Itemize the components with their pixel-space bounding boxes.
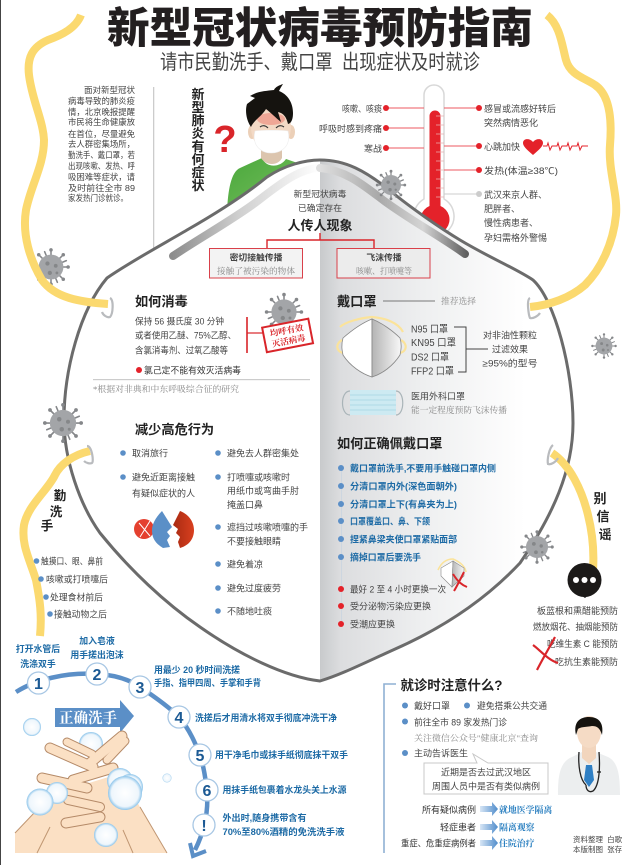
panel: when seeing a doctor: 就诊时注意什么?: [400, 677, 502, 693]
rumour list: 板蓝根和熏醋能预防: [537, 605, 618, 616]
vertical heading: symptoms: 有: [191, 139, 205, 154]
panel: how to wear a mask: 分清口罩内外(深色面朝外): [350, 480, 457, 492]
virus decorations: [32, 170, 617, 564]
panel: how to disinfect: 氯己定不能有效灭活病毒: [144, 364, 241, 376]
panel: how to wear a mask: 受分泌物污染应更换: [350, 600, 431, 612]
step arc with arrow: [16, 674, 207, 856]
symptom labels right: [444, 103, 558, 243]
panel: reduce risky behaviour: 用纸巾或弯曲手肘: [227, 485, 299, 496]
symptom labels right: 发热(体温≥38℃): [484, 165, 558, 176]
vertical heading: symptoms: 症: [191, 165, 205, 180]
arrow: correct hand washing: 正确洗手: [59, 709, 117, 727]
step markers: 1: [34, 676, 43, 693]
symptom labels right: 孕妇需格外警惕: [484, 232, 547, 243]
panel: reduce risky behaviour: 有疑似症状的人: [132, 488, 195, 498]
step markers: [28, 663, 218, 836]
step markers: 3: [136, 680, 145, 697]
panel: wearing masks: N95 口罩: [411, 324, 448, 336]
panel: reduce risky behaviour: 不随地吐痰: [227, 606, 272, 616]
panel: human to human transmission: 飞沫传播: [366, 252, 402, 262]
panel: when seeing a doctor: 关注微信公众号"健康北京"查询: [414, 733, 539, 743]
panel: wearing masks: ≥95%的型号: [482, 358, 538, 368]
step markers: 2: [93, 667, 102, 684]
panel: human to human transmission: 密切接触传播: [230, 252, 283, 262]
step markers: 4: [175, 710, 184, 727]
panel: reduce risky behaviour: 避免着凉: [227, 558, 263, 570]
intro text block: 情，北京晚报提醒: [68, 107, 136, 117]
panel: how to wear a mask: 受潮应更换: [350, 618, 395, 630]
panel: how to disinfect: [93, 293, 313, 394]
icon: speech bubble: [568, 563, 602, 598]
triage flow: 隔离观察: [499, 822, 535, 832]
panel: human to human transmission: 咳嗽、打喷嚏等: [356, 266, 412, 276]
symptom labels right: 慢性病患者、: [484, 217, 538, 228]
panel: how to wear a mask: [337, 435, 496, 630]
step texts: [16, 635, 348, 837]
panel: human to human transmission: 人传人现象: [287, 218, 353, 233]
title: 新型冠状病毒预防指南: [107, 5, 533, 53]
step markers: 6: [203, 783, 212, 800]
heading: rumours: [593, 491, 612, 542]
panel: how to disinfect: 均呼有效: [269, 322, 305, 339]
step texts: 用抹手纸包裹着水龙头关上水源: [222, 784, 347, 795]
callout: 周围人员中是否有类似病例: [432, 780, 540, 792]
ear strap: bottom right: [552, 453, 593, 570]
rumour list: [533, 605, 618, 670]
symptom labels left: 寒战: [364, 143, 382, 154]
subtitle: 请市民勤洗手、戴口罩 出现症状及时就诊: [160, 51, 480, 74]
step texts: 用干净毛巾或抹手纸彻底抹干双手: [215, 749, 348, 760]
panel: when seeing a doctor: 戴好口罩: [414, 700, 450, 711]
step texts: 70%至80%酒精的免洗洗手液: [222, 826, 345, 837]
symptom labels right: 心跳加快: [484, 141, 520, 152]
panel: wearing masks: 对非油性颗粒: [483, 330, 537, 340]
heading: wash hands: 洗: [50, 504, 63, 519]
panel: reduce risky behaviour: 减少高危行为: [135, 421, 214, 437]
panel: wearing masks: 推荐选择: [441, 296, 476, 306]
panel: how to wear a mask: 捏紧鼻梁夹使口罩紧贴面部: [350, 534, 457, 544]
triage flow: 重症、危重症病例者: [401, 838, 476, 848]
panel: how to disinfect: *根据对非典和中东呼吸综合征的研究: [93, 384, 240, 394]
rumour list: 燃放烟花、抽烟能预防: [533, 621, 618, 632]
vertical heading: symptoms: 新: [191, 87, 205, 102]
panel: how to disinfect: 灭活病毒: [271, 333, 307, 349]
panel: wearing masks: 能一定程度预防飞沫传播: [411, 405, 507, 415]
icon: question mark: ?: [213, 119, 237, 161]
panel: how to wear a mask: 口罩覆盖口、鼻、下颌: [350, 516, 430, 526]
panel: human to human transmission: [210, 188, 430, 278]
panel: reduce risky behaviour: 取消旅行: [132, 448, 168, 458]
panel: reduce risky behaviour: 不要接触眼睛: [227, 536, 281, 546]
panel: how to wear a mask: 分清口罩上下(有鼻夹为上): [350, 498, 457, 510]
credits: 本版制图 张存: [573, 844, 623, 854]
intro text block: 去人群密集场所，: [68, 139, 135, 149]
credits: [573, 834, 623, 854]
panel: reduce risky behaviour: 打喷嚏或咳嗽时: [227, 472, 290, 482]
panel: how to disinfect: 如何消毒: [135, 293, 188, 309]
panel: wearing masks: [337, 293, 538, 415]
callout: [424, 754, 548, 794]
heading: wash hands: [41, 488, 66, 533]
heading: rumours: 信: [596, 509, 610, 524]
panel: human to human transmission: 新型冠状病毒: [294, 188, 347, 199]
panel: how to disinfect: 或者使用乙醚、75%乙醇、: [135, 330, 236, 340]
panel: wearing masks: FFP2 口罩: [411, 366, 454, 378]
intro text block: 家发热门诊就诊。: [68, 193, 128, 203]
wash hands list: 接触动物之后: [54, 608, 107, 620]
symptom labels right: 突然病情恶化: [484, 117, 538, 128]
intro text block: 面对新型冠状: [84, 85, 136, 95]
credits: 资料整理 白歌: [573, 834, 623, 844]
panel: reduce risky behaviour: 避免去人群密集处: [227, 448, 299, 458]
step texts: 外出时,随身携带含有: [222, 812, 307, 823]
panel: how to wear a mask: 戴口罩前洗手,不要用手触碰口罩内侧: [350, 462, 496, 474]
heading: rumours: 谣: [598, 527, 612, 542]
step texts: 用最少 20 秒时间洗搓: [154, 664, 240, 675]
panel: reduce risky behaviour: 避免近距离接触: [132, 472, 195, 482]
wash hands list: [34, 556, 108, 620]
rumour list: 吃抗生素能预防: [555, 656, 618, 667]
step markers: !: [201, 818, 207, 835]
intro text block: 在首位，尽量避免: [68, 129, 135, 139]
panel: reduce risky behaviour: [120, 421, 308, 616]
vertical heading: symptoms: 炎: [191, 126, 205, 141]
triage flow: 所有疑似病例: [422, 804, 476, 815]
symptom labels left: [319, 103, 424, 154]
intro text block: 勤洗手、戴口罩，若: [68, 150, 135, 160]
vertical heading: symptoms: 何: [191, 152, 205, 167]
step texts: 加入皂液: [79, 635, 115, 646]
panel: wearing masks: 过滤效果: [492, 344, 528, 354]
intro text block: 及时前往全市 89: [68, 183, 135, 193]
step texts: 洗搓后才用清水将双手彻底冲洗干净: [195, 712, 337, 723]
symptom labels right: 武汉来京人群、: [484, 189, 547, 200]
panel: wearing masks: KN95 口罩: [411, 337, 456, 349]
panel: human to human transmission: 已确定存在: [298, 202, 342, 213]
triage flow: [401, 802, 552, 850]
intro text block: 市民将生命健康放: [68, 117, 136, 127]
intro text block: 出现咳嗽、发热、呼: [68, 161, 136, 171]
triage flow: 就地医学隔离: [499, 804, 552, 815]
symptom labels right: 肥胖者、: [484, 204, 520, 214]
panel: reduce risky behaviour: 遮挡过咳嗽喷嚏的手: [227, 522, 308, 532]
intro text block: 吸困难等症状，请: [68, 172, 136, 182]
icon: heart with pulse: [523, 139, 588, 155]
arrow: correct hand washing: [55, 700, 134, 733]
wash hands list: 触摸口、眼、鼻前: [41, 556, 103, 566]
callout: 近期是否去过武汉地区: [441, 766, 531, 778]
panel: wearing masks: DS2 口罩: [411, 352, 449, 364]
step markers: 5: [196, 748, 205, 765]
panel: how to disinfect: 含氯消毒剂、过氧乙酸等: [135, 344, 228, 356]
symptom labels right: 感冒或流感好转后: [484, 103, 556, 114]
icon: doctor: [558, 716, 620, 795]
step texts: 打开水管后: [16, 643, 60, 654]
vertical heading: symptoms: 型: [191, 100, 205, 115]
heading: rumours: 别: [593, 491, 607, 506]
panel: how to wear a mask: 如何正确佩戴口罩: [337, 435, 442, 451]
heading: wash hands: 勤: [54, 488, 66, 503]
symptom labels left: 咳嗽、咳痰: [342, 103, 382, 114]
vertical heading: symptoms: [191, 87, 205, 193]
panel: how to wear a mask: 最好 2 至 4 小时更换一次: [350, 584, 446, 594]
intro text block: [68, 85, 136, 203]
ear loops: [84, 298, 558, 464]
panel: how to wear a mask: 摘掉口罩后要洗手: [350, 552, 421, 562]
ear strap: top left: [25, 15, 108, 304]
panel: reduce risky behaviour: 掩盖口鼻: [227, 499, 263, 510]
wash hands list: 处理食材前后: [50, 592, 103, 602]
icon: washing hands with bubbles: [15, 718, 172, 853]
step texts: 洗涤双手: [20, 658, 56, 669]
panel: human to human transmission: 接触了被污染的物体: [217, 266, 295, 276]
icon: thermometer: [414, 85, 454, 236]
heading: wash hands: 手: [41, 518, 53, 533]
icon: two heads with sneeze cross: [134, 511, 194, 548]
icon: sick person in mask: [227, 84, 340, 240]
symptom labels left: 呼吸时感到疼痛: [319, 123, 382, 134]
panel: how to disinfect: 保持 56 摄氏度 30 分钟: [135, 316, 224, 326]
panel: mask body: [64, 155, 580, 685]
triage flow: 住院治疗: [499, 838, 535, 848]
icon: N95 mask: [337, 317, 406, 377]
panel: wearing masks: 戴口罩: [337, 293, 377, 309]
panel: when seeing a doctor: 前往全市 89 家发热门诊: [414, 716, 507, 728]
vertical heading: symptoms: 状: [191, 178, 205, 193]
step texts: 用手搓出泡沫: [70, 649, 124, 660]
panel: when seeing a doctor: 避免搭乘公共交通: [477, 700, 547, 711]
ear strap: bottom left: [23, 451, 90, 636]
triage flow: 轻症患者: [440, 822, 476, 832]
panel: wearing masks: 医用外科口罩: [411, 390, 465, 402]
intro text block: 病毒导致的肺炎疫: [68, 96, 136, 106]
ear strap: top right: [530, 15, 616, 307]
wash hands list: 咳嗽或打喷嚏后: [46, 574, 108, 584]
icon: surgical mask: [342, 390, 403, 415]
icon: small mask crossed out: [438, 559, 467, 591]
vertical heading: symptoms: 肺: [191, 113, 205, 128]
panel: when seeing a doctor: 主动告诉医生: [414, 748, 468, 758]
panel: when seeing a doctor: [384, 677, 552, 853]
rumour list: 吃维生素 C 能预防: [547, 638, 618, 649]
panel: reduce risky behaviour: 避免过度疲劳: [227, 582, 281, 594]
step texts: 手指、指甲四周、手掌和手背: [154, 677, 261, 688]
